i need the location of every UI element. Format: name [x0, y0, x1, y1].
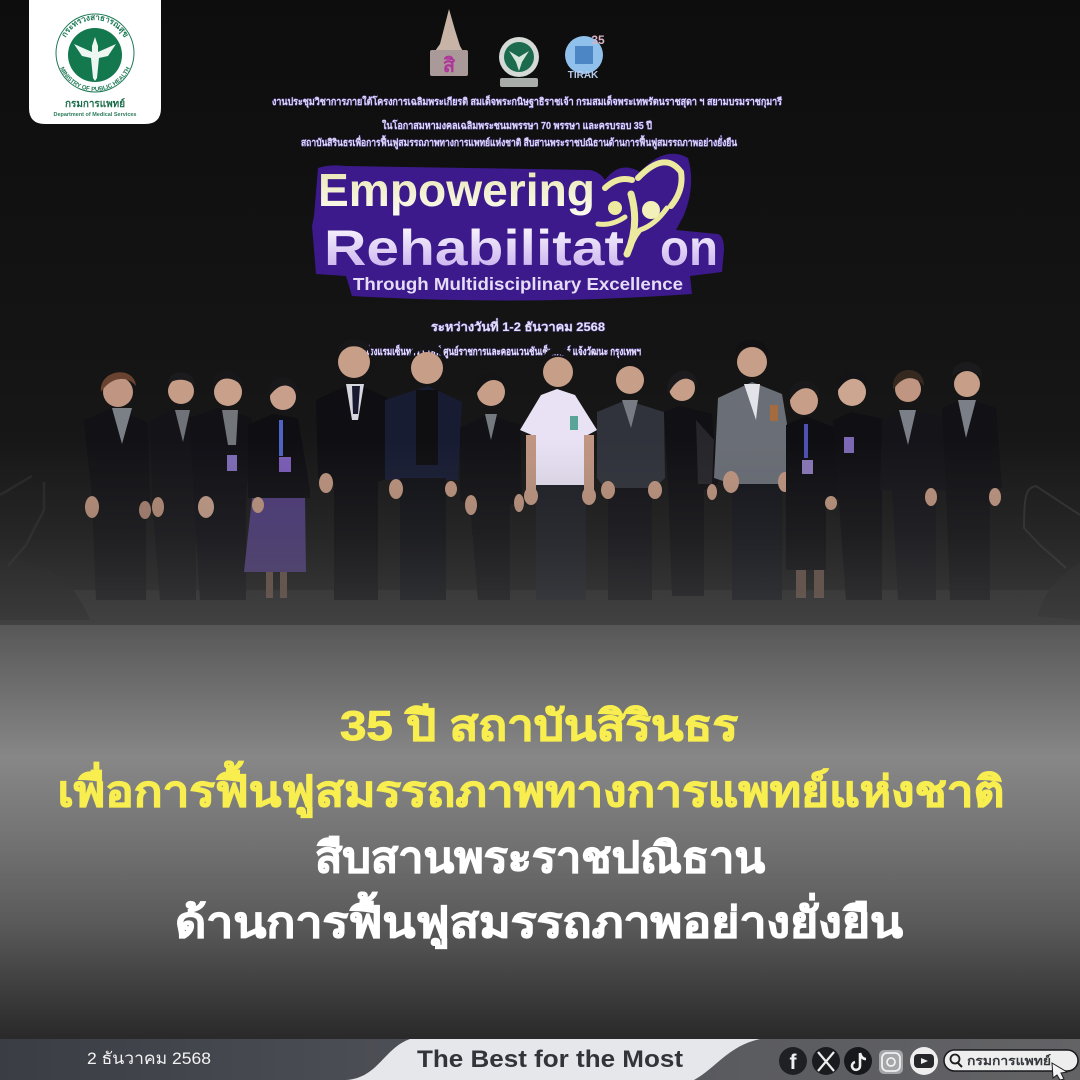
event description text: สถาบันสิรินธรเพื่อการฟื้นฟูสมรรถภาพทางการแพทย์แห่งชาติ สืบสานพระราชปณิธานด้านการฟื้นฟูสมรรถภาพอย่างยั่งยืน [301, 135, 737, 150]
person 6 [385, 343, 462, 600]
logo: royal emblem: สิ [443, 55, 456, 77]
grey fade overlay over photo [0, 440, 1080, 630]
emblem: MINISTRY OF PUBLIC HEALTH [60, 66, 130, 91]
person 8 [520, 347, 597, 600]
person 13 [833, 371, 890, 600]
event description text: งานประชุมวิชาการภายใต้โครงการเฉลิมพระเกียรติ สมเด็จพระกนิษฐาธิราชเจ้า กรมสมเด็จพระเทพรัตนราชสุดา ฯ สยามบรมราชกุมารี [272, 94, 783, 108]
event date and venue [364, 318, 641, 359]
logo: royal emblem [430, 9, 468, 77]
event date and venue: โรงแรมเซ็นทารา ไลฟ์ ศูนย์ราชการและคอนเวนชันเซ็นเตอร์ แจ้งวัฒนะ กรุงเทพฯ [364, 344, 641, 359]
event logo: Empowering Rehabilitation: Empowering [318, 164, 595, 216]
icon: Instagram [879, 1050, 903, 1074]
event description text [272, 94, 783, 150]
icon: facebook: f [790, 1051, 798, 1074]
event date and venue: ระหว่างวันที่ 1-2 ธันวาคม 2568 [431, 318, 605, 334]
person 11 [714, 339, 796, 600]
person 10 [664, 370, 718, 596]
right stage speaker and mic stand [1024, 486, 1080, 620]
department logo card: กรมการแพทย์ [65, 98, 125, 110]
person 9 [597, 358, 665, 600]
icon: facebook [779, 1047, 807, 1075]
event description text: ในโอกาสมหามงคลเฉลิมพระชนมพรรษา 70 พรรษา และครบรอบ 35 ปี [382, 119, 652, 132]
headline: เพื่อการฟื้นฟูสมรรถภาพทางการแพทย์แห่งชาติ [58, 760, 1004, 818]
department logo card [29, 0, 161, 124]
logo: 35 years institute: TIRAK [568, 70, 599, 81]
group of people standing on stage [84, 339, 1002, 600]
event logo: Empowering Rehabilitation [312, 154, 724, 301]
department logo card: Department of Medical Services [54, 112, 136, 118]
person 15 [942, 362, 1002, 600]
search pill [944, 1050, 1078, 1080]
headline: ด้านการฟื้นฟูสมรรถภาพอย่างยั่งยืน [175, 891, 903, 949]
headline: สืบสานพระราชปณิธาน [315, 834, 765, 881]
person 7 [460, 373, 524, 600]
photo background [0, 0, 1080, 640]
person 2 [150, 372, 198, 600]
footer bar [0, 1039, 1080, 1080]
sponsor logos [430, 9, 605, 87]
emblem: กระทรวงสาธารณสุข [62, 15, 128, 38]
search pill: กรมการแพทย์ [967, 1054, 1051, 1068]
person 14 [880, 370, 948, 600]
headline: 35 ปี สถาบันสิรินธร [340, 702, 738, 749]
person 1 [84, 372, 151, 600]
logo: 35 years institute: 35 [591, 33, 605, 47]
icon: TikTok [844, 1047, 872, 1075]
person 4 [244, 377, 310, 598]
headline [58, 702, 1004, 949]
emblem [56, 14, 134, 92]
icon: X [812, 1047, 840, 1075]
icon: YouTube [910, 1047, 938, 1075]
left stage speaker and mic stand [0, 476, 90, 620]
social icons [779, 1047, 1078, 1080]
lower grey gradient panel [0, 625, 1080, 1039]
event logo: Empowering Rehabilitation: on [660, 220, 718, 276]
person 12 [786, 381, 842, 598]
logo: department emblem [499, 37, 539, 87]
icon: heart and figures [598, 162, 682, 254]
person 3 [190, 371, 252, 600]
footer date: 2 ธันวาคม 2568 [87, 1050, 211, 1068]
stage floor [0, 590, 1080, 640]
logo: 35 years institute [565, 33, 605, 81]
footer slogan ribbon [346, 1039, 760, 1080]
person 5 [316, 339, 388, 600]
event logo: Empowering Rehabilitation: Rehabilitat [324, 220, 624, 276]
footer slogan ribbon: The Best for the Most [417, 1046, 683, 1073]
event logo: Empowering Rehabilitation: Through Multidisciplinary Excellence [353, 274, 683, 294]
